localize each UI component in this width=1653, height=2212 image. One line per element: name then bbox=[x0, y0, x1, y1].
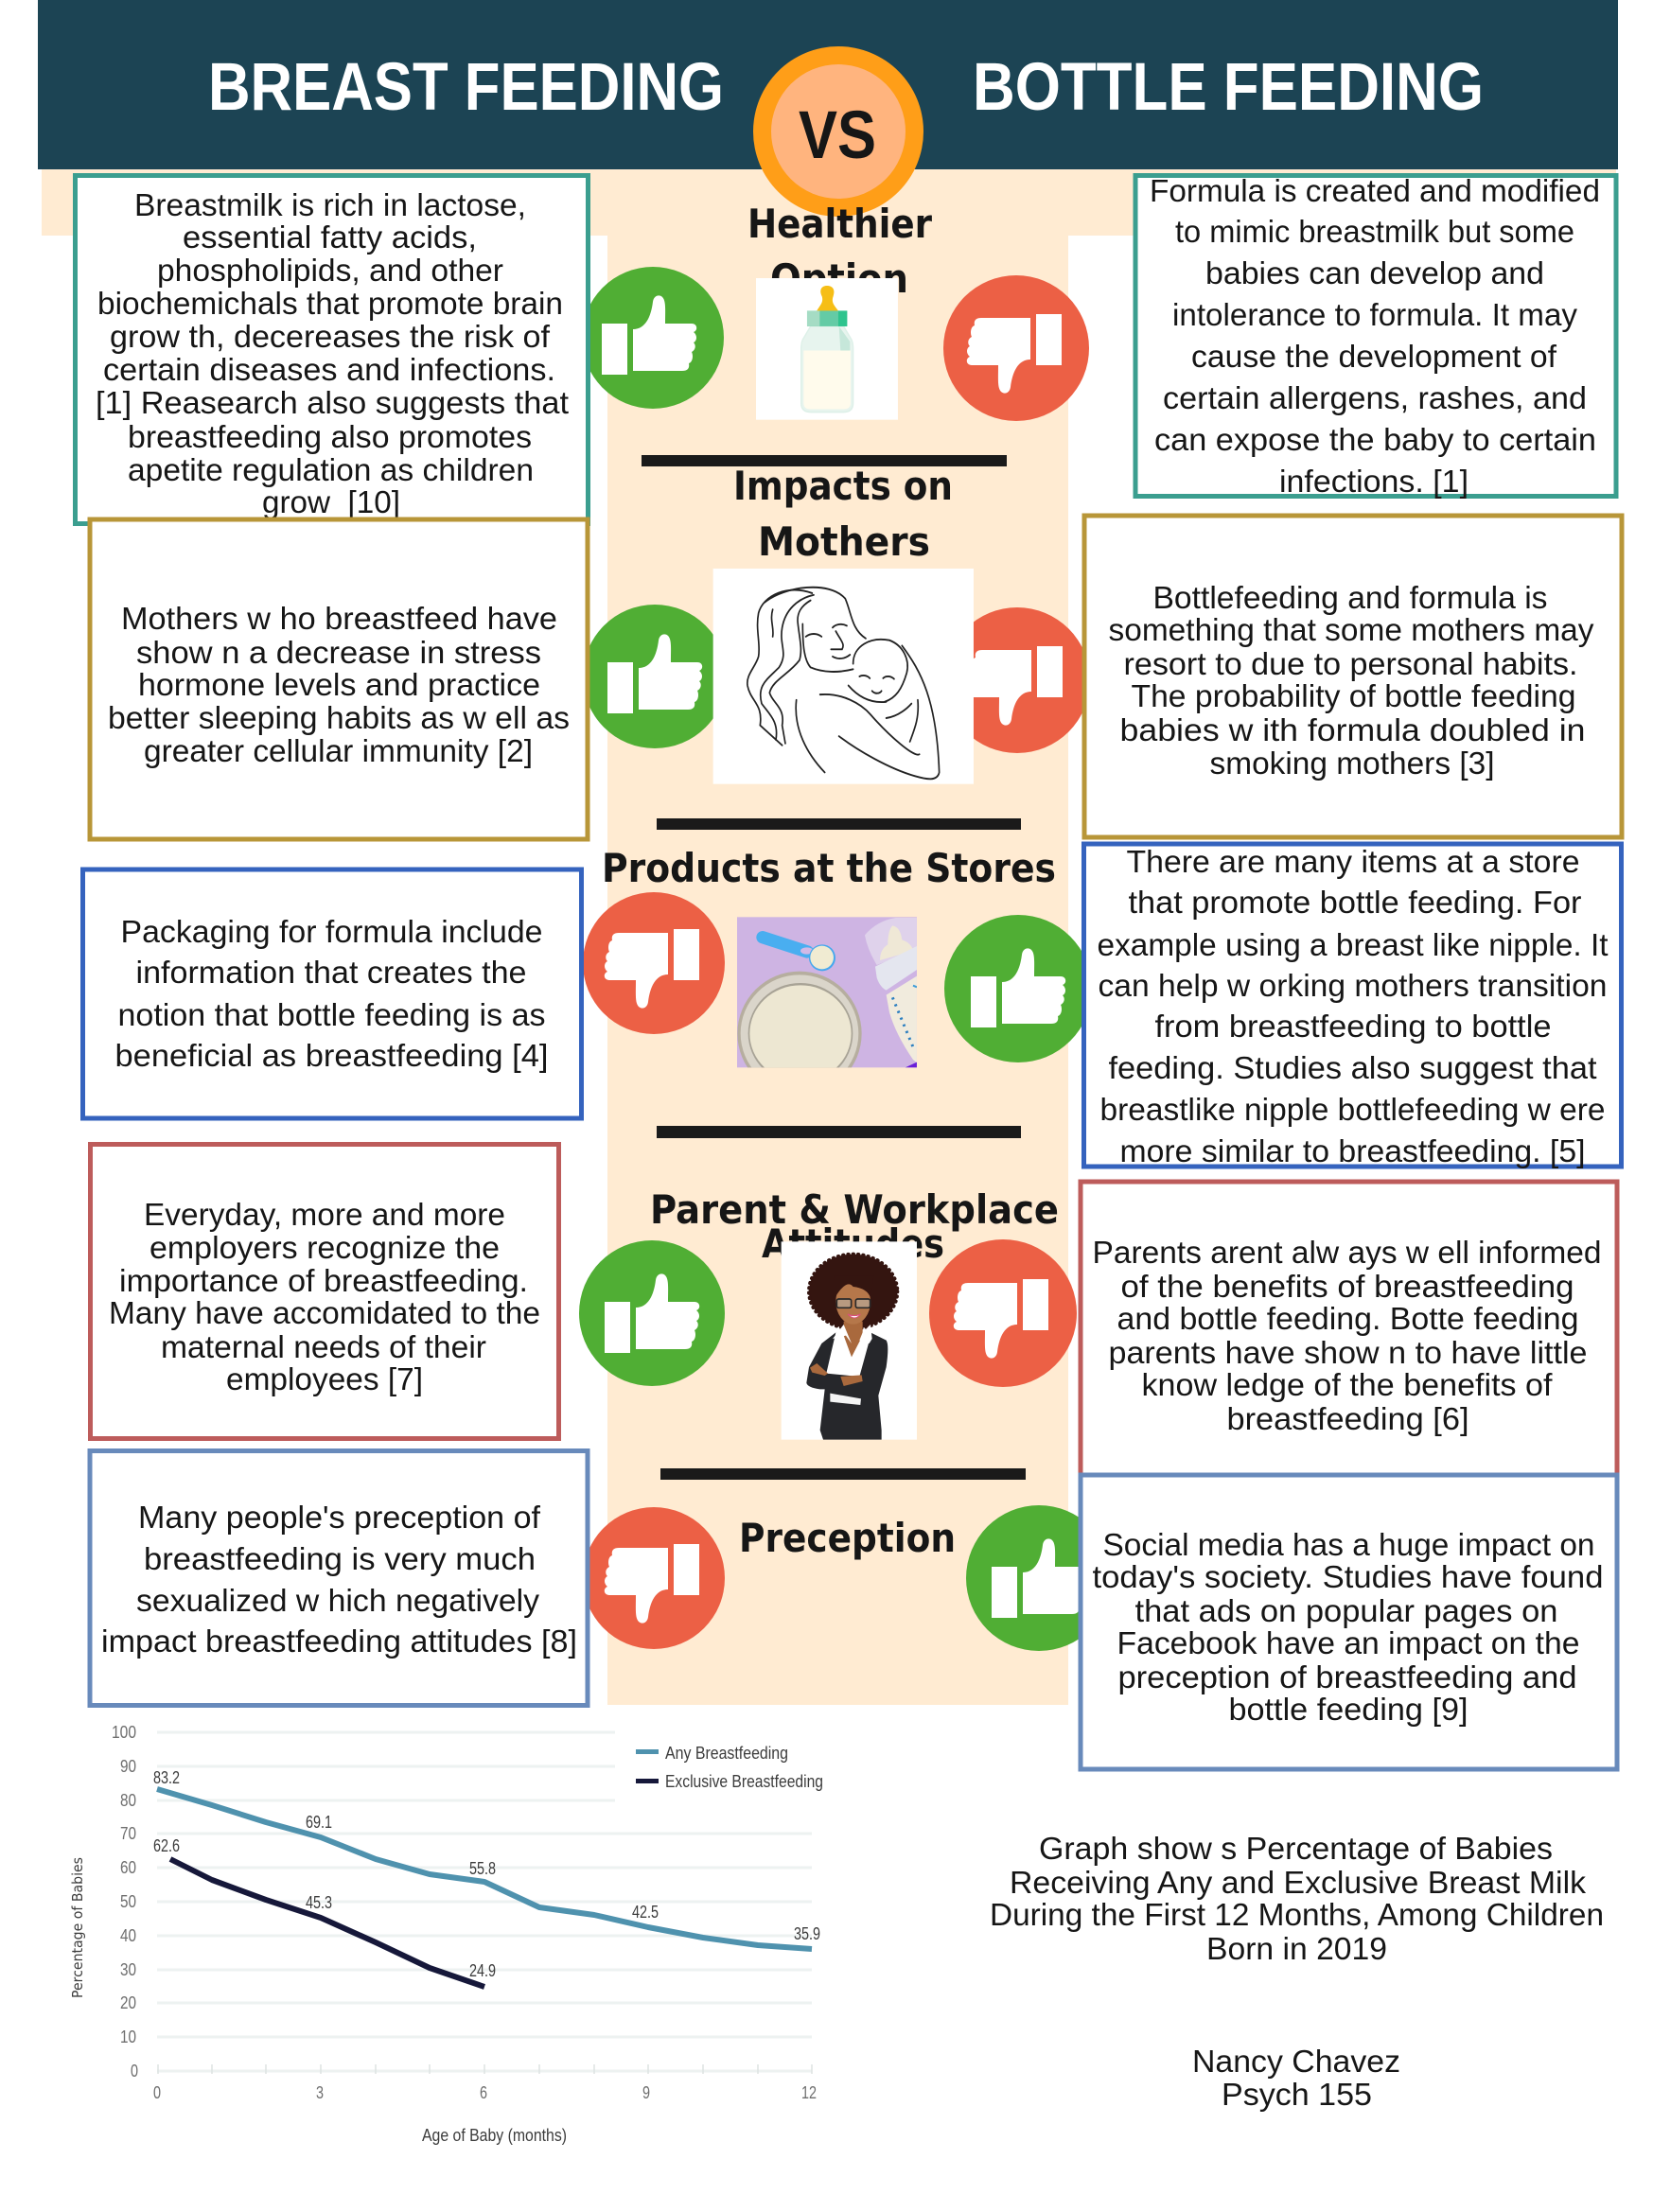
panel: formula intolerance: certain allergens, rashes, and bbox=[1163, 381, 1587, 416]
x axis labels bbox=[153, 2083, 817, 2102]
panel: mothers who breastfeed: greater cellular immunity [2] bbox=[144, 734, 533, 769]
x axis labels: 6 bbox=[480, 2083, 487, 2102]
graph caption: During the First 12 Months, Among Children bbox=[990, 1898, 1604, 1933]
panel: sexualized perception: Many people's preception of bbox=[138, 1501, 541, 1536]
heading: preception: Preception bbox=[739, 1515, 956, 1561]
panel: store items for bottle feeding: There are many items at a store bbox=[1126, 845, 1580, 880]
panel: breastmilk nutrition: Breastmilk is rich in lactose, bbox=[134, 188, 526, 223]
y axis labels: 90 bbox=[120, 1757, 136, 1776]
graph caption: Born in 2019 bbox=[1206, 1932, 1387, 1967]
heading: impacts on mothers bbox=[733, 463, 953, 565]
panel: breastmilk nutrition: apetite regulation as children bbox=[128, 453, 534, 488]
data labels: 35.9 bbox=[794, 1924, 820, 1943]
heading: parent and workplace attitudes bbox=[650, 1186, 1059, 1267]
panel: mothers who breastfeed: hormone levels and practice bbox=[138, 668, 540, 703]
icon: thumbs up 4 bbox=[579, 1240, 725, 1386]
legend: Exclusive Breastfeeding bbox=[665, 1772, 823, 1791]
icon: thumbs up 2 bbox=[583, 605, 727, 748]
divider bbox=[657, 818, 1021, 830]
heading: healthier option: Healthier bbox=[747, 201, 932, 247]
panel: store items for bottle feeding: example using a breast like nipple. It bbox=[1098, 928, 1609, 963]
panel: social media: Facebook have an impact on the bbox=[1117, 1626, 1580, 1661]
data labels: 62.6 bbox=[153, 1836, 180, 1855]
heading: impacts on mothers: Impacts on bbox=[733, 463, 953, 509]
y axis labels: 50 bbox=[120, 1892, 136, 1911]
axis title: age: Age of Baby (months) bbox=[422, 2126, 567, 2145]
legend: Any Breastfeeding bbox=[665, 1744, 788, 1763]
panel: formula intolerance: Formula is created and modified bbox=[1150, 174, 1600, 209]
panel: formula packaging: Packaging for formula include bbox=[121, 915, 543, 950]
panel: store items for bottle feeding: breastlike nipple bottlefeeding w ere bbox=[1099, 1093, 1605, 1128]
panel: bottlefeeding and mothers bbox=[1084, 516, 1622, 837]
background: center column bbox=[607, 169, 1068, 1705]
icon: thumbs up 5 bbox=[966, 1505, 1112, 1651]
panel: social media: Social media has a huge impact on bbox=[1103, 1528, 1595, 1563]
panel: formula intolerance: intolerance to formula. It may bbox=[1172, 298, 1577, 333]
panel: bottlefeeding and mothers: something that some mothers may bbox=[1109, 613, 1594, 648]
panel: employers recognize breastfeeding bbox=[91, 1145, 558, 1438]
panel: parents not informed: of the benefits of breastfeeding bbox=[1120, 1270, 1574, 1305]
panel: social media bbox=[1081, 1475, 1617, 1769]
panel: bottlefeeding and mothers: babies w ith formula doubled in bbox=[1120, 713, 1586, 748]
panel: breastmilk nutrition: grow [10] bbox=[262, 485, 400, 520]
panel: breastmilk nutrition: grow th, decereases the risk of bbox=[110, 320, 551, 355]
panel: formula intolerance: can expose the baby to certain bbox=[1154, 423, 1596, 458]
panel: social media: bottle feeding [9] bbox=[1228, 1693, 1468, 1728]
panel: store items for bottle feeding: that promote bottle feeding. For bbox=[1128, 886, 1582, 921]
x axis labels: 9 bbox=[642, 2083, 650, 2102]
y axis labels: 60 bbox=[120, 1858, 136, 1877]
panel: social media: preception of breastfeeding and bbox=[1118, 1660, 1576, 1695]
panel: sexualized perception: impact breastfeeding attitudes [8] bbox=[101, 1624, 577, 1659]
data labels bbox=[153, 1768, 820, 1980]
heading: products at the stores: Products at the Stores bbox=[602, 845, 1056, 891]
data labels: 83.2 bbox=[153, 1768, 180, 1787]
panel: social media: that ads on popular pages on bbox=[1135, 1594, 1557, 1629]
panel: parents not informed: parents have show n to have little bbox=[1109, 1336, 1588, 1371]
panel: mothers who breastfeed bbox=[90, 519, 588, 839]
panel: store items for bottle feeding: can help w orking mothers transition bbox=[1098, 969, 1607, 1004]
data labels: 42.5 bbox=[632, 1903, 659, 1922]
panel: breastmilk nutrition: essential fatty acids, bbox=[183, 220, 477, 255]
panel: sexualized perception bbox=[90, 1451, 588, 1705]
panel: parents not informed: Parents arent alw ays w ell informed bbox=[1092, 1236, 1601, 1271]
author credit: Nancy Chavez bbox=[1192, 2045, 1400, 2080]
panel: breastmilk nutrition: biochemichals that promote brain bbox=[97, 287, 563, 322]
panel: store items for bottle feeding bbox=[1084, 844, 1622, 1169]
icon: thumbs down 4 bbox=[929, 1239, 1077, 1387]
panel: employers recognize breastfeeding: Everyday, more and more bbox=[144, 1198, 505, 1233]
line chart: breastfeeding by age bbox=[69, 1723, 823, 2145]
panel: formula intolerance: cause the development of bbox=[1191, 340, 1557, 375]
panel: parents not informed: breastfeeding [6] bbox=[1226, 1402, 1468, 1437]
panel: formula intolerance: to mimic breastmilk but some bbox=[1175, 215, 1574, 250]
icon: thumbs up 3 bbox=[944, 915, 1092, 1062]
panel: mothers who breastfeed: better sleeping habits as w ell as bbox=[108, 701, 570, 736]
axis title: percentage: Percentage of Babies bbox=[69, 1857, 86, 1998]
author credit: Psych 155 bbox=[1222, 2078, 1372, 2113]
y axis labels: 100 bbox=[112, 1723, 136, 1742]
heading: parent and workplace attitudes: Parent & Workplace bbox=[650, 1186, 1059, 1233]
image: mother and baby line drawing bbox=[713, 569, 974, 784]
panel: formula intolerance: infections. [1] bbox=[1279, 465, 1468, 500]
y axis labels: 30 bbox=[120, 1960, 136, 1979]
panel: employers recognize breastfeeding: maternal needs of their bbox=[161, 1330, 486, 1365]
icon: thumbs down 2 bbox=[944, 607, 1090, 753]
panel: breastmilk nutrition: certain diseases and infections. bbox=[103, 353, 555, 388]
vs badge bbox=[753, 46, 923, 217]
icon: thumbs down 1 bbox=[943, 275, 1089, 421]
title: bottle feeding: BOTTLE FEEDING bbox=[973, 50, 1484, 125]
panel: employers recognize breastfeeding: employees [7] bbox=[226, 1362, 423, 1397]
y axis labels: 10 bbox=[120, 2028, 136, 2046]
image: baby bottle bbox=[756, 278, 898, 420]
panel: bottlefeeding and mothers: The probability of bottle feeding bbox=[1132, 679, 1576, 714]
panel: employers recognize breastfeeding: importance of breastfeeding. bbox=[119, 1264, 528, 1299]
panel: mothers who breastfeed: show n a decrease in stress bbox=[136, 636, 541, 671]
panel: employers recognize breastfeeding: Many have accomidated to the bbox=[109, 1296, 540, 1331]
panel: bottlefeeding and mothers: smoking mothers [3] bbox=[1209, 746, 1495, 781]
graph caption: Receiving Any and Exclusive Breast Milk bbox=[1010, 1866, 1586, 1901]
panel: employers recognize breastfeeding: employers recognize the bbox=[149, 1231, 500, 1266]
legend bbox=[636, 1744, 823, 1791]
panel: formula intolerance bbox=[1135, 174, 1616, 500]
panel: bottlefeeding and mothers: Bottlefeeding and formula is bbox=[1152, 581, 1548, 616]
panel: formula intolerance: babies can develop and bbox=[1205, 256, 1544, 291]
heading: parent and workplace attitudes: Attitudes bbox=[762, 1220, 944, 1267]
y axis labels: 80 bbox=[120, 1791, 136, 1810]
divider bbox=[642, 455, 1007, 466]
title: breast feeding: BREAST FEEDING bbox=[208, 50, 724, 125]
y axis labels bbox=[112, 1723, 138, 2080]
series: any breastfeeding bbox=[157, 1789, 812, 1949]
author credit bbox=[1192, 2045, 1400, 2113]
y axis labels: 70 bbox=[120, 1824, 136, 1843]
icon: thumbs down 5 bbox=[583, 1507, 725, 1649]
heading: healthier option bbox=[747, 201, 932, 302]
x axis labels: 3 bbox=[316, 2083, 324, 2102]
panel: mothers who breastfeed: Mothers w ho breastfeed have bbox=[121, 602, 557, 637]
panel: breastmilk nutrition: phospholipids, and other bbox=[157, 254, 503, 289]
panel: parents not informed: and bottle feeding. Botte feeding bbox=[1117, 1302, 1578, 1337]
panel: store items for bottle feeding: more similar to breastfeeding. [5] bbox=[1120, 1134, 1586, 1169]
panel: breastmilk nutrition: breastfeeding also promotes bbox=[128, 420, 532, 455]
panel: formula packaging bbox=[83, 869, 581, 1118]
divider bbox=[657, 1126, 1021, 1138]
header banner bbox=[38, 0, 1618, 169]
panel: breastmilk nutrition: [1] Reasearch also suggests that bbox=[96, 386, 570, 421]
y axis labels: 40 bbox=[120, 1926, 136, 1945]
image: businesswoman bbox=[782, 1241, 917, 1440]
panel: sexualized perception: sexualized w hich negatively bbox=[136, 1584, 539, 1619]
panel: formula packaging: notion that bottle feeding is as bbox=[117, 998, 545, 1033]
data labels: 55.8 bbox=[469, 1859, 496, 1878]
image: formula can, scoop and bottle bbox=[737, 917, 917, 1067]
panel: store items for bottle feeding: feeding. Studies also suggest that bbox=[1109, 1051, 1597, 1086]
y axis labels: 20 bbox=[120, 1993, 136, 2012]
panel: formula packaging: information that creates the bbox=[136, 956, 526, 991]
background: peach band bbox=[42, 169, 1616, 236]
data labels: 24.9 bbox=[469, 1961, 496, 1980]
vs badge: VS bbox=[799, 98, 876, 173]
x axis labels: 12 bbox=[801, 2083, 817, 2102]
graph caption bbox=[990, 1832, 1604, 1967]
icon: thumbs down 3 bbox=[583, 892, 725, 1034]
heading: healthier option: Option bbox=[770, 255, 908, 302]
x axis labels: 0 bbox=[153, 2083, 161, 2102]
icon: thumbs up 1 bbox=[582, 267, 724, 409]
y axis labels: 0 bbox=[131, 2062, 138, 2080]
panel: sexualized perception: breastfeeding is very much bbox=[144, 1542, 536, 1577]
series: exclusive breastfeeding bbox=[170, 1859, 484, 1987]
panel: social media: today's society. Studies have found bbox=[1092, 1560, 1603, 1595]
panel: store items for bottle feeding: from breastfeeding to bottle bbox=[1154, 1009, 1552, 1045]
data labels: 45.3 bbox=[306, 1893, 332, 1912]
heading: impacts on mothers: Mothers bbox=[758, 518, 930, 565]
panel: breastmilk nutrition bbox=[76, 176, 589, 524]
graph caption: Graph show s Percentage of Babies bbox=[1039, 1832, 1553, 1867]
data labels: 69.1 bbox=[306, 1813, 332, 1832]
divider bbox=[660, 1468, 1026, 1480]
panel: formula packaging: beneficial as breastfeeding [4] bbox=[115, 1039, 549, 1074]
panel: parents not informed: know ledge of the benefits of bbox=[1141, 1368, 1553, 1403]
panel: bottlefeeding and mothers: resort to due to personal habits. bbox=[1124, 647, 1578, 682]
panel: parents not informed bbox=[1081, 1182, 1617, 1484]
